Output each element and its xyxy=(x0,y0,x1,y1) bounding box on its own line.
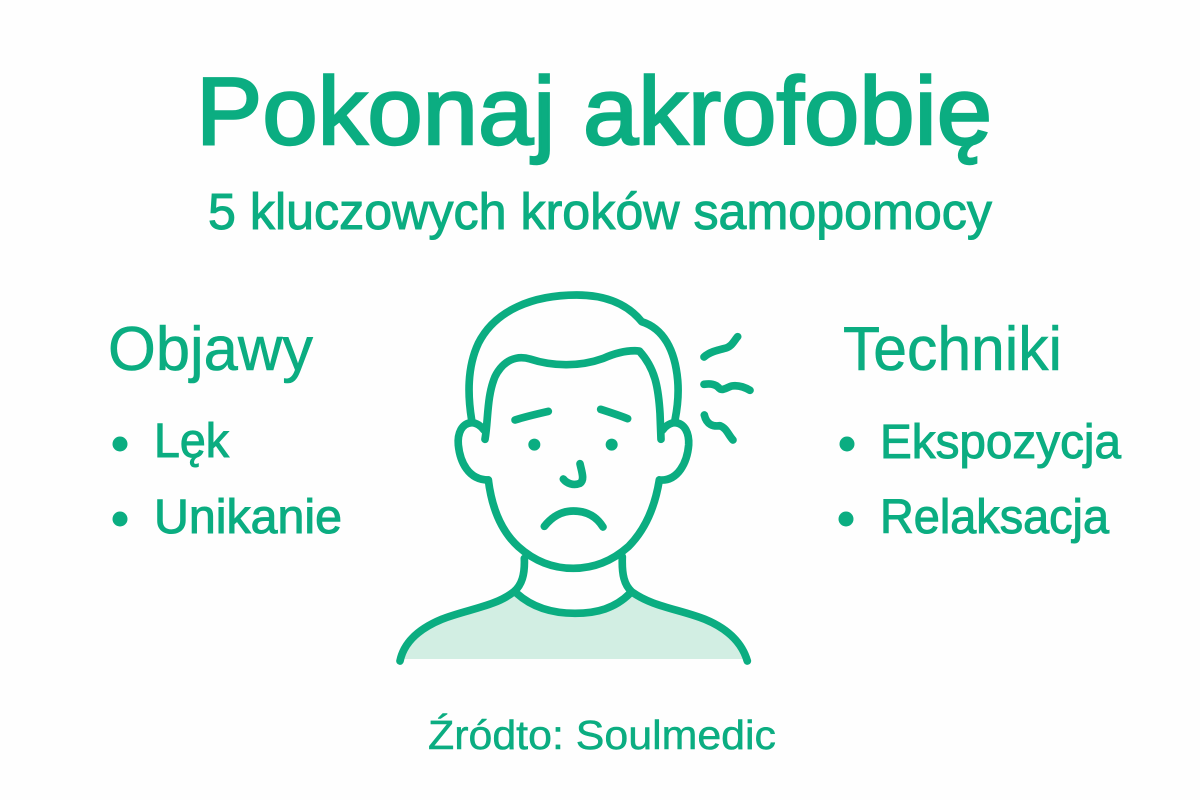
heading: Techniki: Techniki xyxy=(843,315,1062,384)
left ear xyxy=(458,423,488,480)
subtitle: 5 kluczowych kroków samopomocy xyxy=(208,183,992,240)
panel: techniques xyxy=(838,315,1121,544)
icon: worried man xyxy=(400,295,750,661)
list item: Ekspozycja: Ekspozycja xyxy=(880,416,1121,469)
mouth xyxy=(544,511,603,527)
list item: Relaksacja: Relaksacja xyxy=(880,491,1109,544)
list item: Unikanie: Unikanie xyxy=(154,491,342,544)
face outline xyxy=(488,480,659,568)
nose xyxy=(563,464,583,484)
panel: symptoms xyxy=(108,315,342,544)
lines of distress xyxy=(704,337,750,440)
heading: Objawy: Objawy xyxy=(108,315,313,384)
source: Źródto: Soulmedic xyxy=(428,712,776,758)
list item: Lęk xyxy=(112,415,230,468)
eyes xyxy=(528,439,618,451)
hair xyxy=(469,295,678,420)
shirt fill xyxy=(401,593,744,659)
eyebrows xyxy=(515,409,628,420)
title: Pokonaj akrofobię xyxy=(196,58,992,165)
shoulders and collar xyxy=(400,557,747,661)
list item: Lęk: Lęk xyxy=(154,415,230,468)
hairline xyxy=(485,351,661,439)
right ear xyxy=(659,423,689,480)
